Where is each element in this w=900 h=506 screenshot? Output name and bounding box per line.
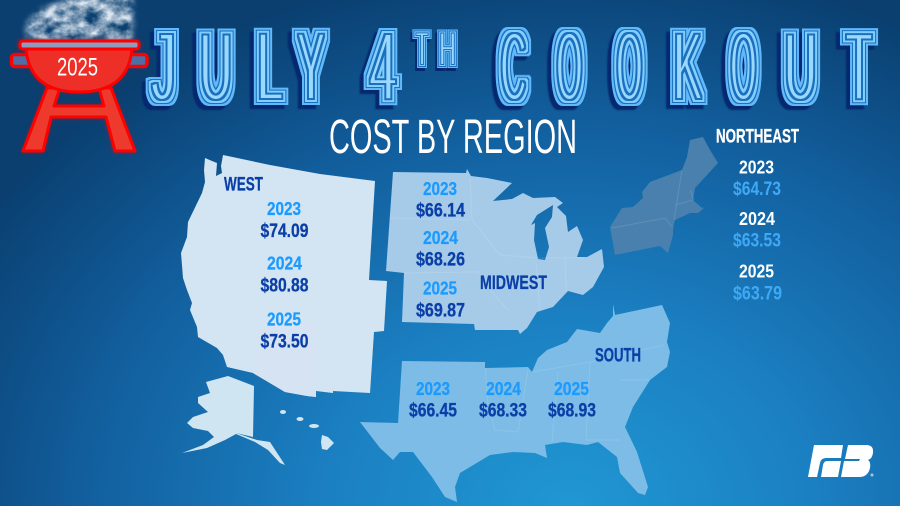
South 2024: $68.33 (479, 401, 527, 422)
Midwest 2023 (416, 179, 465, 222)
title: July 4th Cookout: C (501, 14, 526, 121)
West 2025 (260, 310, 308, 353)
title: July 4th Cookout: J (151, 14, 176, 122)
West 2024 (260, 254, 308, 297)
map region: South (360, 304, 670, 502)
Midwest 2024: 2024 (423, 228, 458, 248)
West 2023: $74.09 (260, 221, 308, 242)
Northeast 2024: 2024 (739, 209, 775, 229)
title: July 4th Cookout: Y (297, 12, 325, 121)
map region: West (181, 155, 387, 397)
South 2025: $68.93 (548, 401, 596, 422)
title: July 4th Cookout: U (784, 13, 817, 121)
South 2023 (409, 379, 457, 422)
Northeast 2023 (733, 157, 781, 200)
grill lid rim (20, 41, 139, 49)
Midwest 2023: 2023 (423, 179, 457, 199)
Midwest 2025: 2025 (423, 278, 457, 298)
West costs (224, 175, 308, 353)
West 2023 (260, 199, 308, 242)
title: July 4th Cookout: O (617, 13, 642, 121)
West 2024: $80.88 (260, 276, 308, 297)
Northeast 2025: 2025 (739, 261, 774, 281)
title: July 4th Cookout: H (439, 23, 456, 75)
West 2024: 2024 (267, 254, 302, 274)
Midwest 2025: $69.87 (416, 301, 465, 322)
title: July 4th Cookout (151, 12, 872, 122)
icon: red grill with year (12, 40, 147, 152)
subtitle: COST BY REGION (329, 111, 577, 164)
Midwest costs (416, 179, 547, 322)
Northeast 2025: $63.79 (733, 283, 782, 304)
title: July 4th Cookout: L (257, 13, 283, 122)
Midwest 2024 (416, 228, 465, 271)
South 2023: $66.45 (409, 401, 457, 422)
South 2024 (479, 379, 527, 422)
Northeast 2023: 2023 (739, 157, 774, 177)
West heading: WEST (224, 175, 263, 196)
title: July 4th Cookout: U (200, 13, 232, 121)
Midwest 2025 (416, 278, 465, 322)
grill handles (12, 54, 147, 66)
Northeast 2023: $64.73 (733, 179, 781, 200)
South heading: SOUTH (595, 346, 641, 367)
title: July 4th Cookout: O (557, 13, 582, 121)
grill year: 2025 (57, 54, 98, 82)
South costs (409, 346, 641, 422)
Northeast heading: NORTHEAST (716, 126, 799, 147)
Midwest heading: MIDWEST (480, 273, 547, 294)
Northeast costs (716, 126, 799, 304)
title: July 4th Cookout: 4 (370, 14, 396, 122)
logo: Farm Bureau mark (808, 445, 874, 477)
Northeast 2024 (733, 209, 781, 252)
grill legs (23, 88, 135, 151)
title: July 4th Cookout: T (846, 12, 872, 121)
map region: Northeast (610, 137, 718, 255)
map: Hawaii (280, 410, 334, 450)
title: July 4th Cookout: T (416, 22, 428, 75)
grill bowl (26, 49, 132, 92)
West 2025: $73.50 (260, 332, 308, 353)
Northeast 2024: $63.53 (733, 231, 781, 252)
West 2023: 2023 (267, 199, 301, 219)
icon: grill smoke (26, 0, 134, 40)
Northeast 2025 (733, 261, 782, 304)
South 2024: 2024 (486, 379, 521, 399)
Midwest 2024: $68.26 (416, 250, 465, 271)
South 2025 (548, 379, 596, 422)
map: Alaska (182, 376, 285, 465)
map region: Midwest (386, 169, 604, 334)
South 2025: 2025 (554, 379, 589, 399)
West 2025: 2025 (267, 310, 301, 330)
title: July 4th Cookout: O (731, 13, 756, 121)
title: July 4th Cookout: K (673, 12, 703, 121)
Midwest 2023: $66.14 (416, 201, 465, 222)
South 2023: 2023 (416, 379, 450, 399)
